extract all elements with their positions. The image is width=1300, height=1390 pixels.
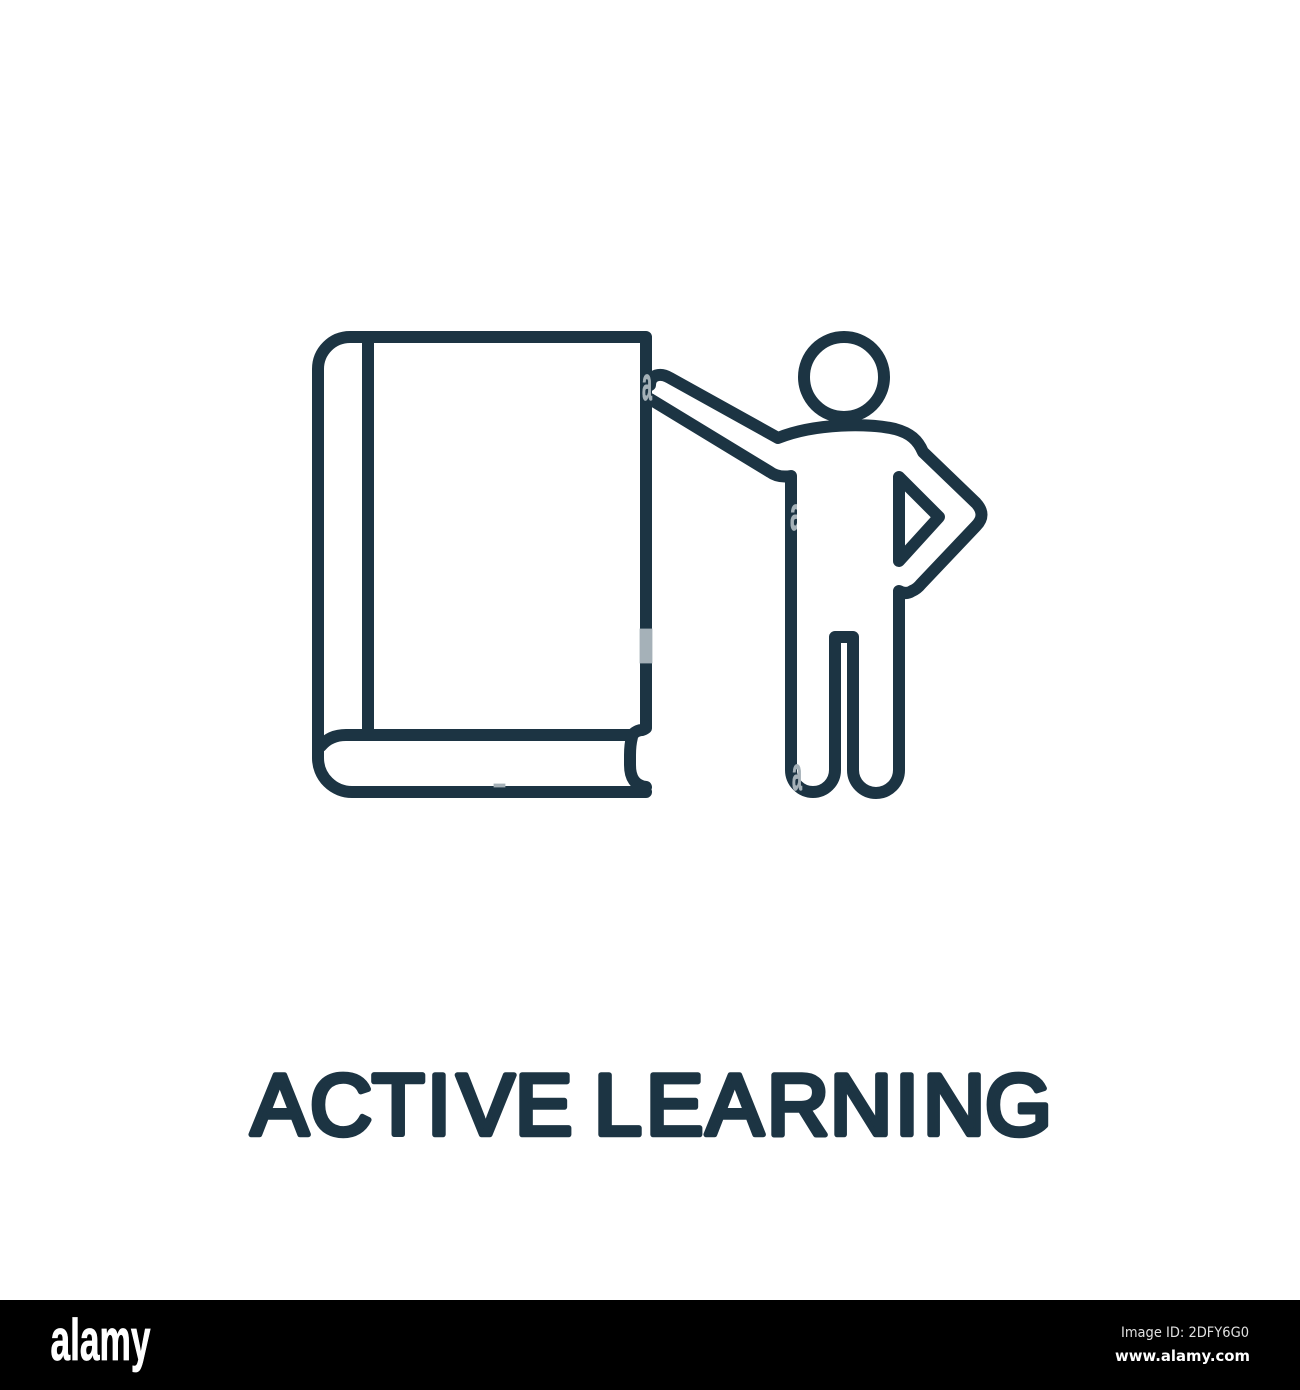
icon: book xyxy=(318,337,646,792)
footer bar xyxy=(0,1300,1300,1390)
brand logo: alamy xyxy=(50,1308,150,1373)
watermark fragments xyxy=(494,357,802,800)
watermark fragments: a xyxy=(642,357,652,410)
person hand-on-hip triangle xyxy=(899,477,939,561)
infographic canvas xyxy=(0,331,1300,1390)
person head xyxy=(804,337,884,417)
infographic canvas: a xyxy=(790,487,802,540)
icon: active learning, person beside book xyxy=(318,337,982,793)
website: www.alamy.com xyxy=(1115,1347,1250,1365)
image id: Image ID: 2DFY6G0 xyxy=(1121,1325,1249,1341)
icon: person xyxy=(650,337,982,793)
title: ACTIVE LEARNING xyxy=(251,1058,1052,1154)
infographic canvas: a xyxy=(792,747,802,800)
person body and raised arm xyxy=(650,375,982,793)
